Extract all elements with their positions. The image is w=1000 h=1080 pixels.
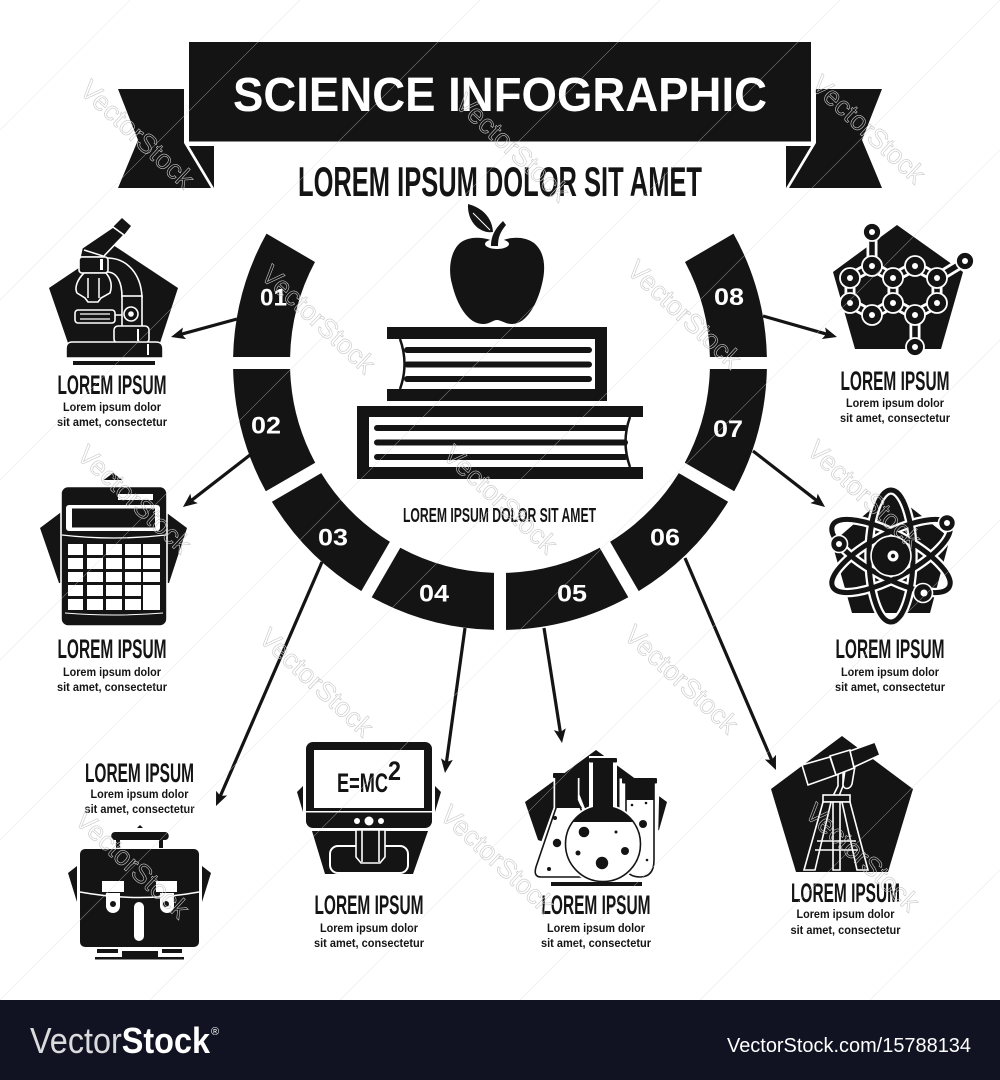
- segment 05: 05: [557, 580, 587, 608]
- ribbon main band: [189, 42, 811, 142]
- watermarks: VectorStock: [449, 87, 575, 208]
- label: briefcase: [84, 758, 195, 816]
- label: calculator: LOREM IPSUM: [58, 634, 166, 664]
- arrows from ring to icons: [177, 316, 831, 800]
- arrow 06: [685, 558, 774, 764]
- panel: atom: [822, 490, 960, 694]
- segment 07: 07: [713, 416, 743, 443]
- label: flasks: LOREM IPSUM: [542, 890, 650, 920]
- watermarks: VectorStock: [621, 254, 747, 375]
- icon: calculator: [40, 473, 187, 626]
- watermarks: VectorStock: [255, 259, 381, 380]
- panel: telescope: [771, 736, 913, 937]
- label: monitor: sit amet, consectetur: [314, 938, 424, 950]
- equation text: E=MC: [337, 768, 388, 798]
- segment 02: [233, 369, 315, 491]
- arrow 03: [218, 562, 322, 800]
- arrow 02: [188, 455, 250, 503]
- segment 06: 06: [650, 524, 680, 552]
- subtitle: LOREM IPSUM DOLOR SIT AMET: [298, 158, 702, 205]
- label: atom: Lorem ipsum dolor: [841, 667, 939, 679]
- footer logo: VectorStock: [30, 1020, 211, 1061]
- central illustration: apple on books: [357, 204, 643, 527]
- label: calculator: [57, 634, 167, 694]
- segment 05: [506, 548, 628, 630]
- segment 03: 03: [318, 524, 348, 552]
- label: calculator: sit amet, consectetur: [57, 682, 167, 694]
- panel: equation monitor: [297, 742, 441, 950]
- panel: briefcase: [68, 758, 211, 960]
- segment 07: [685, 369, 767, 491]
- segment 01: 01: [260, 284, 287, 312]
- watermarks: VectorStock: [799, 797, 925, 918]
- label: flasks: sit amet, consectetur: [541, 938, 651, 950]
- panel: calculator: [40, 473, 187, 694]
- label: microscope: LOREM IPSUM: [58, 370, 166, 400]
- label: briefcase: sit amet, consectetur: [84, 804, 195, 816]
- arrow 05: [544, 628, 561, 737]
- equation text: 2: [388, 756, 401, 786]
- watermarks: VectorStock: [801, 434, 927, 555]
- central caption: LOREM IPSUM DOLOR SIT AMET: [403, 505, 596, 527]
- label: flasks: [541, 890, 651, 950]
- watermarks: VectorStock: [805, 69, 931, 190]
- icon: bottom book: [357, 406, 643, 479]
- label: molecule: [840, 366, 950, 425]
- segment 08: 08: [714, 284, 744, 311]
- ribbon left tail: [118, 89, 214, 188]
- watermarks: VectorStock: [69, 804, 195, 925]
- ribbon right tail: [786, 89, 882, 188]
- segment 03: [272, 473, 390, 591]
- watermarks: VectorStock: [74, 74, 200, 195]
- label: monitor: Lorem ipsum dolor: [320, 923, 418, 935]
- label: microscope: sit amet, consectetur: [57, 417, 167, 429]
- label: atom: sit amet, consectetur: [835, 682, 945, 694]
- label: telescope: Lorem ipsum dolor: [796, 909, 895, 921]
- label: monitor: LOREM IPSUM: [314, 890, 424, 920]
- footer bar: [0, 1000, 1000, 1080]
- segment 02: 02: [251, 412, 281, 440]
- segment 04: 04: [419, 580, 449, 608]
- icon: molecule: [833, 223, 974, 356]
- segment 06: [610, 473, 728, 591]
- segment 01: [233, 234, 315, 357]
- label: briefcase: Lorem ipsum dolor: [90, 789, 189, 801]
- footer image id: VectorStock.com/15788134: [727, 1035, 971, 1057]
- title: SCIENCE INFOGRAPHIC: [233, 69, 767, 122]
- icon: monitor: [297, 742, 441, 874]
- icon: briefcase: [68, 825, 211, 960]
- watermarks: VectorStock: [437, 439, 563, 560]
- icon: microscope: [49, 218, 178, 365]
- label: telescope: [790, 878, 901, 937]
- icon: top book: [387, 327, 607, 401]
- header ribbon: [118, 42, 882, 188]
- label: molecule: sit amet, consectetur: [840, 413, 950, 425]
- equation text: [337, 756, 401, 798]
- segment 08: [685, 234, 767, 357]
- segment 04: [372, 548, 494, 630]
- label: microscope: Lorem ipsum dolor: [63, 402, 161, 414]
- arrow 04: [446, 628, 465, 767]
- panel: microscope: [49, 218, 178, 429]
- left flask: [534, 773, 610, 878]
- label: atom: [835, 634, 945, 694]
- panel: flasks: [525, 750, 667, 950]
- label: calculator: Lorem ipsum dolor: [63, 667, 161, 679]
- right tube: [622, 778, 657, 878]
- arrow 08: [763, 316, 831, 335]
- label: microscope: [57, 370, 167, 429]
- icon: telescope: [771, 736, 913, 872]
- ring of numbered segments: [233, 234, 767, 630]
- icon: apple: [450, 204, 544, 324]
- label: telescope: LOREM IPSUM: [791, 878, 900, 908]
- round flask: [563, 756, 643, 884]
- icon: flasks: [525, 750, 667, 886]
- label: briefcase: LOREM IPSUM: [85, 758, 194, 788]
- registered mark: ®: [211, 1026, 219, 1038]
- label: molecule: Lorem ipsum dolor: [846, 398, 944, 410]
- watermarks: VectorStock: [71, 439, 197, 560]
- arrow 01: [177, 319, 237, 335]
- panel: molecule: [833, 223, 974, 425]
- watermarks: VectorStock: [253, 622, 379, 743]
- watermarks: VectorStock: [434, 799, 560, 920]
- label: flasks: Lorem ipsum dolor: [547, 923, 645, 935]
- watermarks: [69, 69, 931, 925]
- label: monitor: [314, 890, 424, 950]
- watermarks: VectorStock: [618, 619, 744, 740]
- arrow 07: [753, 451, 820, 503]
- icon: atom: [822, 490, 960, 622]
- label: telescope: sit amet, consectetur: [790, 925, 901, 937]
